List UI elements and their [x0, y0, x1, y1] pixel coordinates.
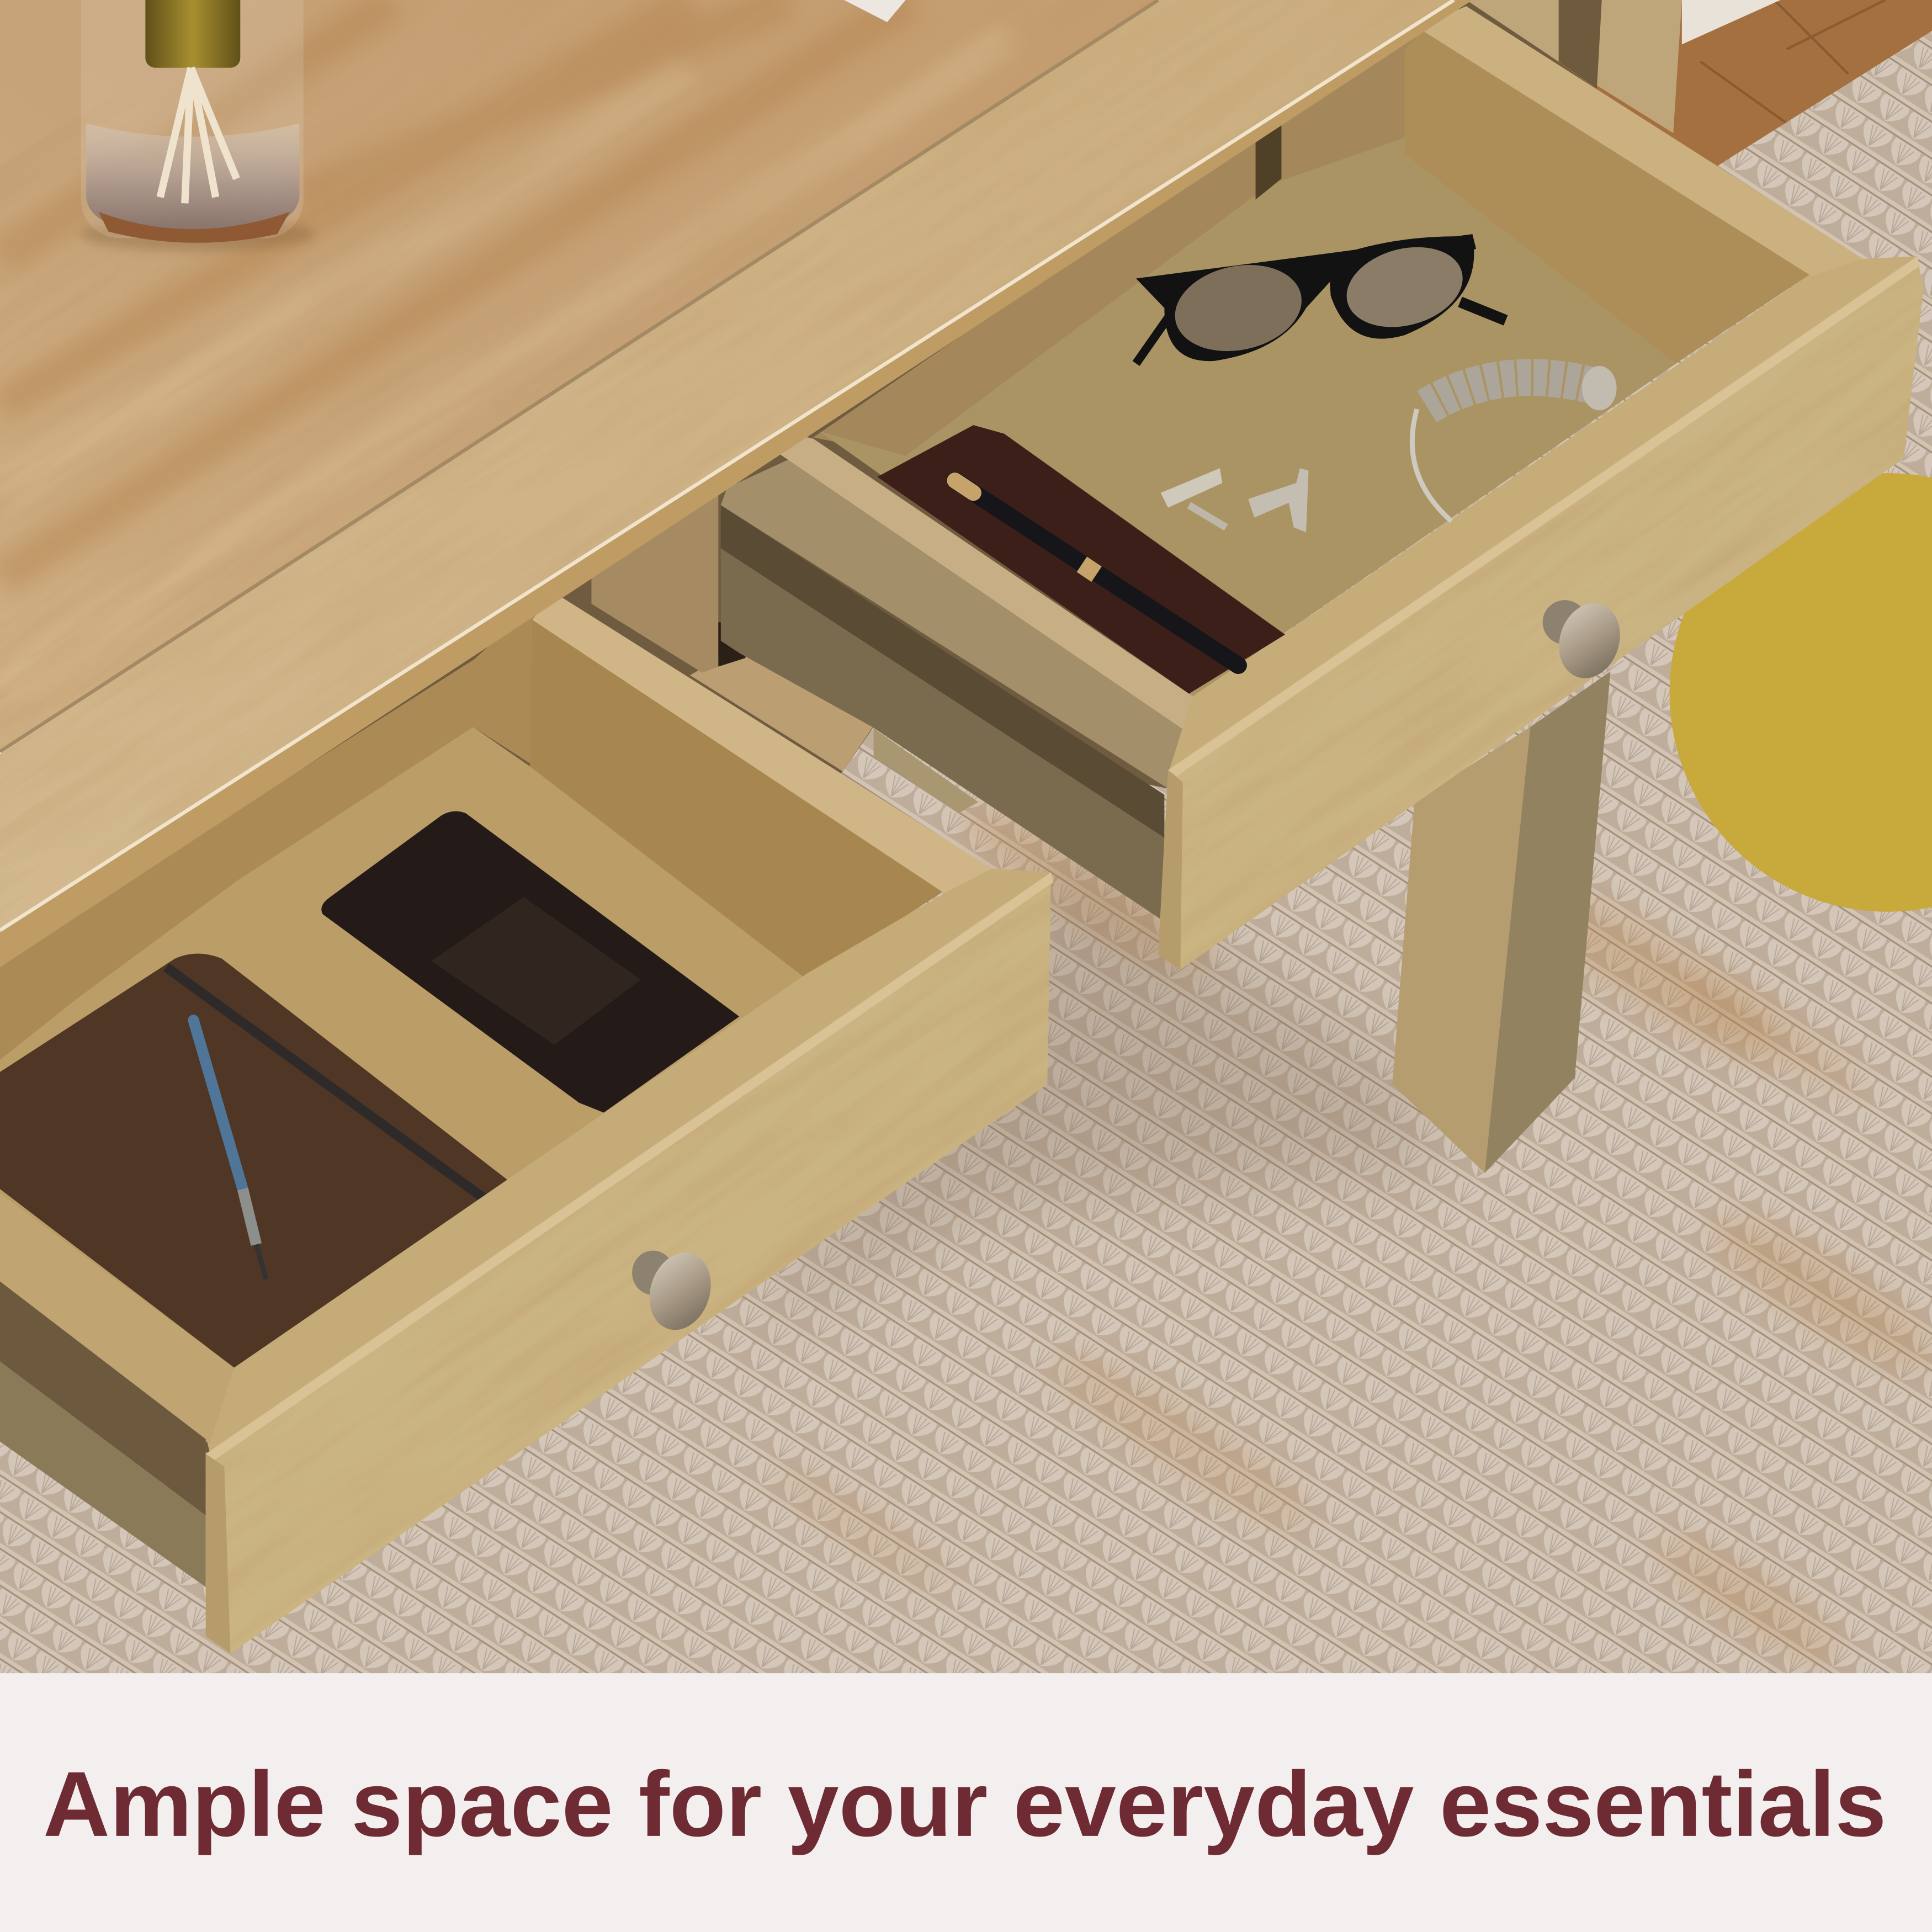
icon: bracket behind right drawer floor [1256, 123, 1281, 200]
shadowed backing beneath table [0, 0, 1626, 1454]
parquet floor, top right [1454, 0, 1932, 185]
right drawer: inner right wall [1405, 12, 1811, 363]
white box on table [844, 0, 906, 22]
reed diffuser [80, 0, 314, 251]
table top surface [0, 0, 1531, 1060]
left drawer: notebook [0, 954, 511, 1368]
left drawer: near side rim [0, 1193, 234, 1444]
right drawer: floor [819, 136, 1694, 696]
front right table leg [1392, 672, 1610, 1173]
right drawer: near rim [779, 434, 1214, 742]
table front apron [0, 0, 1540, 1020]
caption band [0, 1673, 1932, 1932]
left drawer: outer side [0, 1281, 206, 1516]
yellow stool seat [1670, 473, 1932, 912]
left drawer: right rim [532, 593, 992, 895]
icon: knob on left drawer [632, 1245, 720, 1338]
back table post, top right [1466, 0, 1780, 133]
icon: fountain pen [955, 481, 1238, 665]
icon: knob on right drawer [1543, 595, 1630, 686]
right drawer: near wall face [721, 458, 1201, 789]
icon: leather notebook [877, 425, 1285, 694]
left drawer: blue pencil [193, 1020, 266, 1279]
right drawer: back wall [813, 6, 1442, 456]
left drawer: tablet [321, 811, 739, 1113]
left drawer: inner right wall [530, 604, 946, 980]
left drawer: front rim [206, 869, 1051, 1451]
left drawer: back wall [0, 604, 535, 1060]
left drawer: floor [0, 727, 813, 1368]
heading: Ample space for your everyday essentials [43, 1753, 1886, 1856]
right drawer [721, 6, 1923, 969]
right drawer: lower outer side [721, 548, 1164, 922]
left drawer [0, 598, 1053, 1654]
right drawer: dark groove [721, 505, 1164, 838]
icon: cufflinks [1161, 468, 1309, 532]
back left leg and floor beneath [591, 493, 978, 813]
left drawer: front panel [206, 872, 1051, 1654]
icon: wrist watch [1412, 366, 1617, 521]
icon: glasses [1136, 234, 1506, 363]
right drawer: front rim [1168, 256, 1917, 774]
right drawer: front panel [1158, 256, 1923, 970]
